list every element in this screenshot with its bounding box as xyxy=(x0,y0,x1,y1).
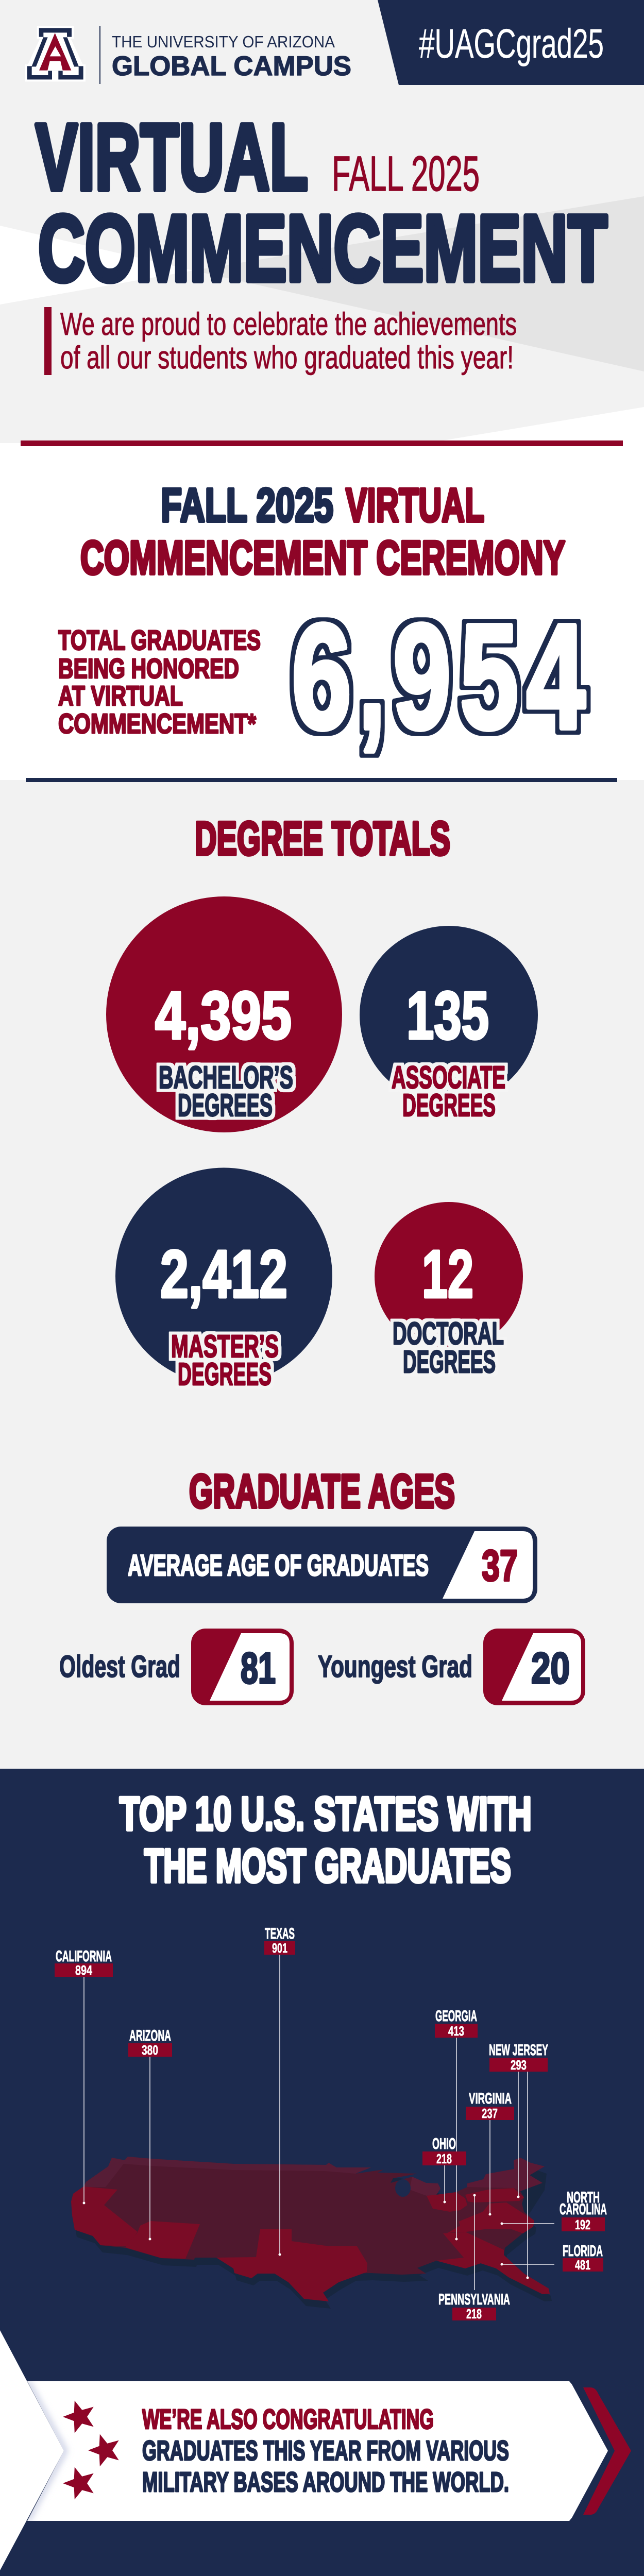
label: Georgia: 413 xyxy=(448,2023,464,2039)
lake michigan xyxy=(395,2179,411,2197)
circle: master's degrees: MASTER’S xyxy=(171,1329,279,1364)
total graduates label: BEING HONORED xyxy=(58,653,239,684)
US map xyxy=(71,2157,552,2309)
label: Florida: 481 xyxy=(575,2257,590,2273)
states heading xyxy=(120,1788,532,1892)
hashtag tab xyxy=(378,0,644,85)
label: California: 894 xyxy=(75,1962,92,1978)
title: FALL 2025 xyxy=(332,146,480,201)
circle: master's degrees: DEGREES xyxy=(178,1357,272,1392)
total graduates label xyxy=(58,625,261,739)
label: Arizona: ARIZONA xyxy=(129,2027,171,2044)
heading: degree totals: DEGREE TOTALS xyxy=(195,812,450,865)
label: California: CALIFORNIA xyxy=(56,1948,112,1965)
circle: bachelor's degrees: BACHELOR’S xyxy=(159,1060,293,1095)
label: Virginia xyxy=(466,2090,514,2121)
circle: bachelor's degrees: 4,395 xyxy=(155,977,292,1053)
icon: block A xyxy=(25,26,86,81)
ceremony heading: VIRTUAL xyxy=(346,479,484,532)
callout: oldest grad xyxy=(59,1629,294,1705)
label: Pennsylvania xyxy=(438,2291,510,2321)
label: Texas: 901 xyxy=(272,1940,287,1956)
title xyxy=(36,104,607,301)
panel: ceremony total xyxy=(0,440,644,782)
icon: arrow chevron xyxy=(583,2387,631,2515)
callout: oldest grad: 81 xyxy=(241,1644,276,1693)
circle: doctoral degrees xyxy=(375,1202,523,1379)
label: Pennsylvania: PENNSYLVANIA xyxy=(438,2291,510,2308)
total graduates label: TOTAL GRADUATES xyxy=(58,625,261,656)
circle: doctoral degrees: DEGREES xyxy=(403,1344,496,1379)
big number 6,954 xyxy=(292,594,586,760)
state: texas xyxy=(216,2229,367,2301)
state: california xyxy=(71,2187,138,2246)
logo: University of Arizona Global Campus xyxy=(25,26,351,84)
banner text: WE’RE ALSO CONGRATULATING xyxy=(142,2404,434,2435)
label: Arizona xyxy=(128,2027,172,2058)
big number 6,954: 9 xyxy=(393,594,451,760)
heading: graduate ages: GRADUATE AGES xyxy=(189,1465,455,1518)
leader lines xyxy=(82,1955,554,2290)
callout: average age: 37 xyxy=(482,1541,518,1590)
label: Ohio: OHIO xyxy=(432,2136,456,2153)
icon: stars xyxy=(63,2401,119,2499)
intro statement xyxy=(44,307,517,376)
label: Georgia xyxy=(435,2008,478,2039)
label: Georgia: GEORGIA xyxy=(435,2008,477,2025)
title: VIRTUAL xyxy=(36,104,308,210)
ceremony heading xyxy=(80,479,565,584)
logo: University of Arizona Global Campus: GLOBAL CAMPUS xyxy=(112,51,351,81)
label: North Carolina: CAROLINA xyxy=(560,2201,607,2218)
ceremony heading: FALL 2025 xyxy=(161,479,333,532)
circle: doctoral degrees: DOCTORAL xyxy=(393,1316,504,1351)
callout: average age xyxy=(107,1527,537,1603)
circle: master's degrees xyxy=(115,1167,332,1392)
circle: associate degrees: 135 xyxy=(406,977,489,1053)
state: pennsylvania and new jersey xyxy=(465,2188,524,2202)
circle: associate degrees: ASSOCIATE xyxy=(392,1060,505,1095)
label: Virginia: 237 xyxy=(482,2106,498,2121)
label: Pennsylvania: 218 xyxy=(466,2306,482,2321)
panel: top 10 states xyxy=(0,1769,644,2576)
label: New Jersey: NEW JERSEY xyxy=(489,2042,548,2059)
circle: associate degrees: DEGREES xyxy=(402,1088,496,1123)
label: Texas xyxy=(264,1925,295,1956)
big number 6,954: 6 xyxy=(292,594,351,760)
circle: bachelor's degrees xyxy=(106,896,342,1132)
state: virginia and north carolina xyxy=(447,2202,534,2233)
logo: University of Arizona Global Campus: THE UNIVERSITY OF ARIZONA xyxy=(112,32,335,51)
big number 6,954: 5 xyxy=(460,594,518,760)
label: Ohio xyxy=(422,2136,466,2166)
label: Virginia: VIRGINIA xyxy=(469,2090,512,2107)
label: New Jersey xyxy=(489,2042,548,2073)
label: Florida: FLORIDA xyxy=(563,2243,603,2260)
circle: master's degrees: 2,412 xyxy=(160,1236,287,1312)
label: Texas: TEXAS xyxy=(265,1925,295,1942)
callout: oldest grad: Oldest Grad xyxy=(59,1649,180,1684)
state: ohio xyxy=(427,2192,467,2212)
circle: doctoral degrees: 12 xyxy=(422,1236,473,1312)
callout: youngest grad xyxy=(318,1629,585,1705)
state: georgia and florida xyxy=(436,2232,550,2294)
label: North Carolina: NORTH xyxy=(567,2189,600,2206)
label: Ohio: 218 xyxy=(436,2151,452,2166)
callout: military graduates banner xyxy=(0,2330,631,2570)
label: New Jersey: 293 xyxy=(511,2057,527,2073)
state: arizona xyxy=(125,2221,200,2259)
callout: average age: AVERAGE AGE OF GRADUATES xyxy=(128,1549,429,1582)
callout: youngest grad: 20 xyxy=(531,1644,570,1693)
banner text xyxy=(142,2404,509,2498)
label: North Carolina: 192 xyxy=(575,2217,590,2232)
big number 6,954: 4 xyxy=(527,594,586,760)
label: California xyxy=(55,1948,113,1978)
label: Florida xyxy=(563,2243,603,2273)
label: North Carolina xyxy=(560,2189,607,2232)
total graduates label: AT VIRTUAL xyxy=(58,681,183,711)
callout: youngest grad: Youngest Grad xyxy=(318,1649,472,1684)
total graduates label: COMMENCEMENT* xyxy=(58,708,256,739)
circle: associate degrees xyxy=(360,926,538,1123)
big number 6,954: , xyxy=(359,594,385,760)
circle: bachelor's degrees: DEGREES xyxy=(178,1088,273,1123)
label: Arizona: 380 xyxy=(142,2042,158,2058)
